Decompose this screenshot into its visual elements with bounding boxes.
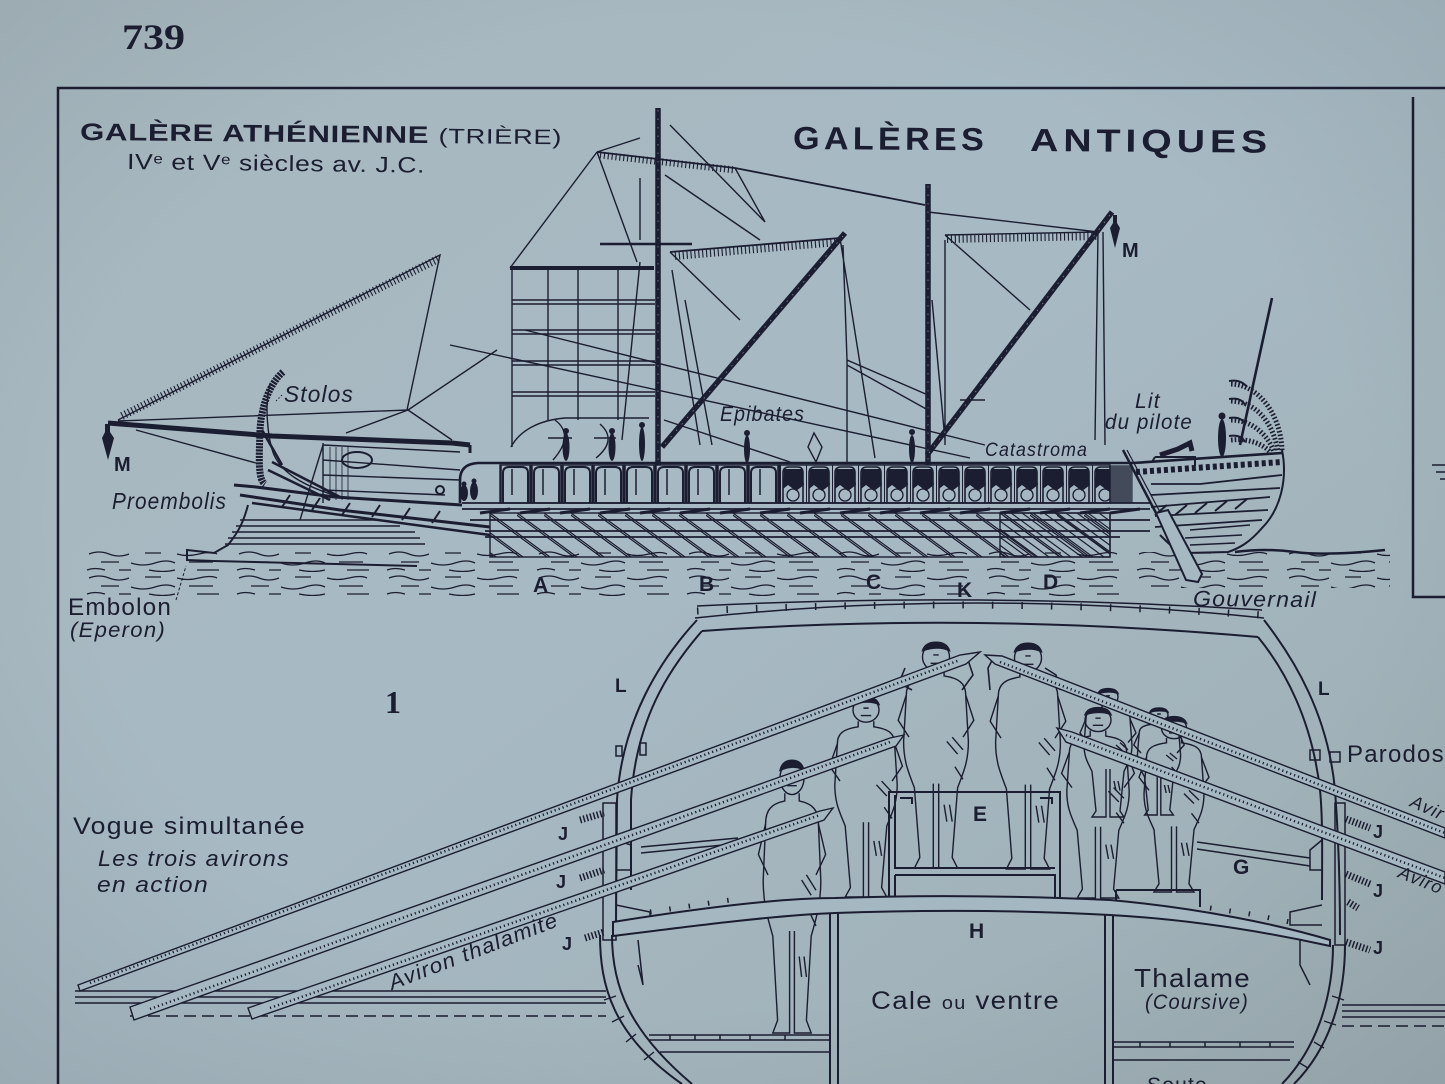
masts and yards: [108, 108, 1112, 465]
figure number: 1: [385, 684, 401, 720]
ship labels: M: [114, 454, 132, 476]
ship labels: du pilote: [1105, 411, 1193, 434]
deckhouse: [300, 443, 460, 520]
section labels: (Coursive): [1145, 991, 1249, 1014]
crew on gallery: [460, 412, 1226, 501]
ship labels: Proembolis: [112, 488, 227, 514]
ship labels: Embolon: [68, 594, 172, 621]
ship labels: C: [866, 571, 882, 594]
section labels: G: [1233, 856, 1251, 879]
mid sail: [450, 238, 985, 462]
section labels: J: [1373, 938, 1384, 958]
ship labels: Catastroma: [985, 440, 1088, 461]
ship labels: A: [533, 574, 549, 597]
section labels: J: [556, 872, 567, 892]
ship labels: (Eperon): [70, 619, 166, 642]
vogue simultanée caption: Les trois avirons: [98, 846, 290, 871]
section labels: E: [973, 803, 988, 826]
title: galère athénienne: et V: [163, 149, 221, 175]
ship labels: [68, 240, 1317, 642]
title: galère athénienne: e: [221, 151, 231, 167]
main deck H: [613, 896, 1330, 946]
section: oars: [78, 652, 1445, 1020]
main heading: [793, 120, 1272, 160]
weights: [102, 215, 1120, 460]
rigging and sails: [102, 108, 1120, 465]
bulkheads: [830, 913, 1113, 1084]
section: thole pins: [580, 813, 1370, 950]
oarports gallery: [460, 463, 1150, 537]
title: galère athénienne: siècles av. J.C.: [231, 150, 425, 178]
vogue simultanée caption: en action: [97, 872, 209, 897]
title: galère athénienne: GALÈRE ATHÉNIENNE (TRIÈRE): [80, 118, 562, 150]
ship labels: Stolos: [284, 381, 354, 407]
top sail: [597, 125, 925, 240]
section labels: J: [1373, 881, 1384, 901]
upper deck: [695, 600, 1264, 637]
ship labels: D: [1043, 571, 1059, 594]
title: galère athénienne: e: [153, 150, 164, 166]
main heading: GALÈRES: [793, 120, 988, 157]
section labels: J: [1373, 822, 1384, 842]
water: [85, 548, 1390, 598]
page number: 739: [122, 17, 185, 57]
section labels: H: [969, 920, 985, 943]
vogue simultanée caption: Vogue simultanée: [73, 813, 306, 840]
ship labels: Epibates: [720, 403, 805, 426]
bow and ram: [187, 485, 490, 566]
aphlaston stern ornament: [1229, 298, 1282, 452]
ship hull: [187, 298, 1284, 582]
main sail: [510, 138, 692, 447]
ship labels: K: [957, 579, 973, 602]
section labels: Aviro: [1395, 862, 1445, 898]
title: galère athénienne: IV: [127, 149, 149, 174]
section labels: L: [1318, 679, 1331, 700]
oar banks: [480, 509, 1140, 557]
section labels: Thalame: [1134, 963, 1251, 993]
gunwale rails: [641, 838, 1310, 866]
title: galère athénienne: [80, 118, 562, 178]
ship labels: B: [699, 573, 715, 596]
archers' bows and shield: [548, 420, 822, 462]
lower decks: [649, 1035, 1294, 1060]
stolos prow: [259, 372, 340, 500]
aft sail: [928, 212, 1105, 445]
section labels: [384, 676, 1445, 1084]
section labels: J: [558, 824, 569, 844]
section labels: J: [562, 934, 573, 954]
section labels: L: [615, 676, 628, 697]
section labels: Parodos: [1347, 741, 1445, 768]
ship labels: Lit: [1135, 390, 1161, 413]
pilot bed and rudder: [1123, 443, 1202, 582]
right panel fragment: [1432, 465, 1445, 479]
ship labels: M: [1122, 240, 1140, 262]
central bench E: [889, 792, 1060, 898]
right platform: [1116, 890, 1200, 907]
section labels: Aviron thalamite: [384, 909, 562, 995]
section: rowers: [758, 642, 1209, 1033]
foresail: [118, 255, 497, 463]
hull walls: [600, 620, 1345, 1084]
section: hull cross-section: [600, 600, 1345, 1084]
stern: [1133, 450, 1284, 553]
vogue simultanée caption: [73, 813, 306, 897]
posts and brackets: [603, 743, 1345, 985]
section labels: Cale ou ventre: [871, 987, 1060, 1015]
main heading: ANTIQUES: [1030, 122, 1272, 160]
waterline: [75, 991, 1445, 1026]
ship labels: Gouvernail: [1193, 586, 1317, 612]
